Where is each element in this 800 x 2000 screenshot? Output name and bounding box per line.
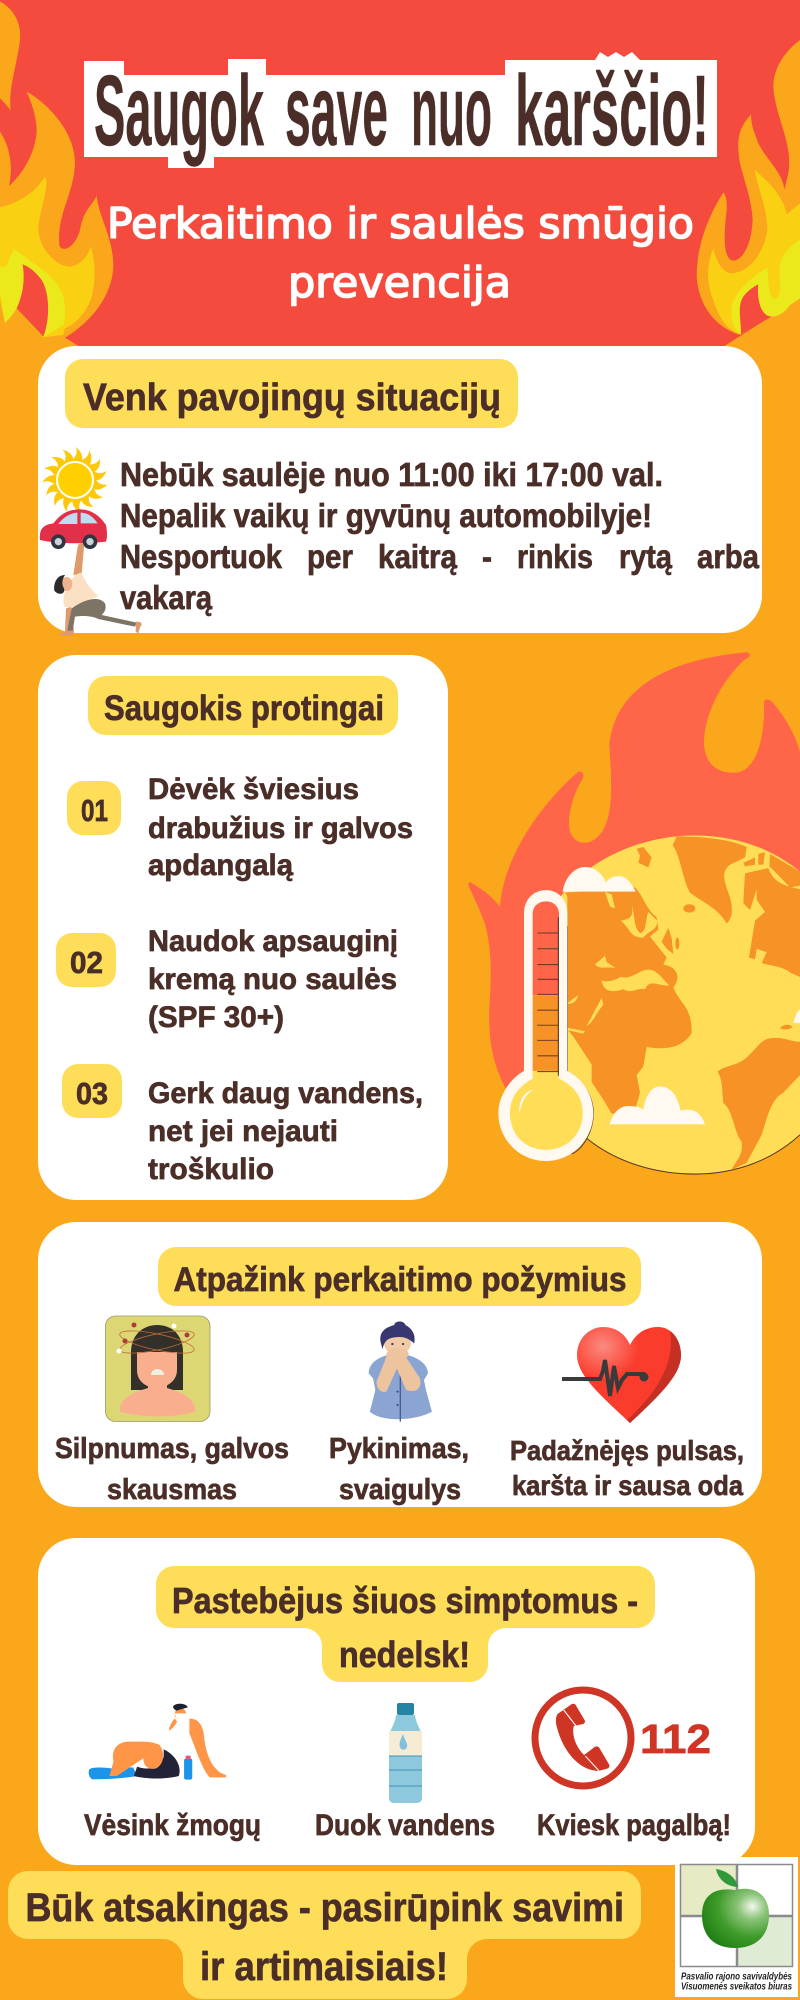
tip 01 text: drabužius ir galvos	[148, 812, 413, 845]
subtitle: prevencija	[288, 258, 511, 307]
flames: left	[0, 2, 113, 338]
tip 03 text: troškulio	[148, 1153, 274, 1186]
label: silpnumas: Silpnumas, galvos	[55, 1433, 289, 1465]
label: pykinimas: svaigulys	[339, 1474, 461, 1506]
title: Saugok	[94, 55, 264, 167]
number badge 01: 01	[81, 793, 108, 828]
heading: atpažink perkaitimo požymius	[158, 1247, 641, 1306]
heading: pastebėjus šiuos simptomus: nedelsk!	[339, 1634, 470, 1675]
label: pykinimas	[329, 1433, 469, 1506]
text block: situations: rytą	[619, 538, 673, 575]
panel: atpažink perkaitimo požymius	[38, 1222, 762, 1507]
icon: phone 112	[535, 1690, 711, 1786]
clouds	[563, 867, 800, 1124]
text block: situations: Nesportuok	[120, 538, 283, 575]
subtitle	[107, 199, 694, 307]
text block: situations: arba	[697, 538, 760, 575]
tip 02 text: kremą nuo saulės	[148, 963, 397, 996]
icon: person cooling down	[89, 1704, 226, 1780]
icon: nauseous person	[369, 1321, 432, 1422]
thermometer	[498, 890, 593, 1161]
number badge 02	[56, 933, 116, 987]
icon: car	[40, 509, 107, 549]
label: vėsink žmogų: Vėsink žmogų	[84, 1809, 261, 1842]
closing banner	[8, 1871, 641, 1999]
heading: saugokis protingai	[88, 676, 398, 735]
text block: situations: Nepalik vaikų ir gyvūnų automobilyje!	[120, 497, 652, 534]
panel: pastebėjus simptomus	[38, 1538, 755, 1865]
title: save	[285, 55, 388, 167]
icon: sun	[41, 447, 109, 514]
label: silpnumas: skausmas	[107, 1474, 237, 1506]
label: silpnumas	[55, 1433, 289, 1506]
tip 01 text: apdangalą	[148, 849, 293, 882]
number badge 01	[67, 781, 121, 835]
tip 01 text: Dėvėk šviesius	[148, 773, 359, 806]
text block: situations	[120, 456, 760, 616]
logo	[675, 1857, 798, 1997]
heading: venk pavojingų situacijų: Venk pavojingų situacijų	[83, 377, 501, 419]
heading: pastebėjus šiuos simptomus	[156, 1566, 655, 1682]
label: kviesk pagalbą: Kviesk pagalbą!	[537, 1809, 731, 1842]
header background	[0, 0, 800, 347]
text block: situations: -	[482, 538, 492, 575]
icon: yoga person	[54, 543, 142, 636]
heading: saugokis protingai: Saugokis protingai	[104, 689, 384, 728]
illustration: burning globe with thermometer	[468, 652, 800, 1174]
tip 02 text	[148, 925, 398, 1034]
number badge 02: 02	[70, 945, 103, 980]
icon: heart with pulse	[562, 1327, 681, 1423]
label: padažnėjęs pulsas	[510, 1435, 744, 1501]
flame behind globe	[468, 652, 800, 1096]
text block: situations: vakarą	[120, 579, 213, 616]
closing banner: Būk atsakingas - pasirūpink savimi	[26, 1886, 624, 1930]
number badge 03: 03	[76, 1076, 108, 1111]
icon: dizzy woman	[106, 1316, 210, 1422]
number badge 03	[62, 1064, 122, 1118]
tip 03 text: Gerk daug vandens,	[148, 1077, 423, 1110]
text block: situations: per	[307, 538, 353, 575]
closing banner: ir artimaisiais!	[200, 1945, 448, 1989]
icon: phone 112: 112	[640, 1716, 711, 1762]
heading: venk pavojingų situacijų	[65, 359, 518, 428]
tip 03 text: net jei nejauti	[148, 1115, 338, 1148]
continents	[565, 836, 800, 1170]
label: pykinimas: Pykinimas,	[329, 1433, 469, 1465]
heading: atpažink perkaitimo požymius: Atpažink perkaitimo požymius	[174, 1261, 626, 1299]
title	[84, 52, 717, 168]
panel: venk pavojingų situacijų	[38, 346, 762, 636]
tip 02 text: (SPF 30+)	[148, 1001, 284, 1034]
tip 03 text	[148, 1077, 423, 1186]
text block: situations: rinkis	[517, 538, 593, 575]
tip 02 text: Naudok apsauginį	[148, 925, 398, 958]
label: duok vandens: Duok vandens	[315, 1809, 495, 1842]
icon: water bottle	[389, 1703, 422, 1803]
label: padažnėjęs pulsas: Padažnėjęs pulsas,	[510, 1435, 744, 1466]
globe	[525, 835, 800, 1174]
tip 01 text	[148, 773, 413, 882]
flames: right	[697, 40, 800, 335]
text block: situations: kaitrą	[378, 538, 458, 575]
continent gaps	[567, 892, 669, 1034]
label: padažnėjęs pulsas: karšta ir sausa oda	[512, 1470, 743, 1501]
heading: pastebėjus šiuos simptomus: Pastebėjus šiuos simptomus -	[172, 1580, 638, 1621]
title: nuo	[411, 55, 492, 167]
subtitle: Perkaitimo ir saulės smūgio	[107, 199, 694, 248]
panel: saugokis protingai	[38, 655, 448, 1200]
text block: situations: Nebūk saulėje nuo 11:00 iki 17:00 val.	[120, 456, 663, 493]
